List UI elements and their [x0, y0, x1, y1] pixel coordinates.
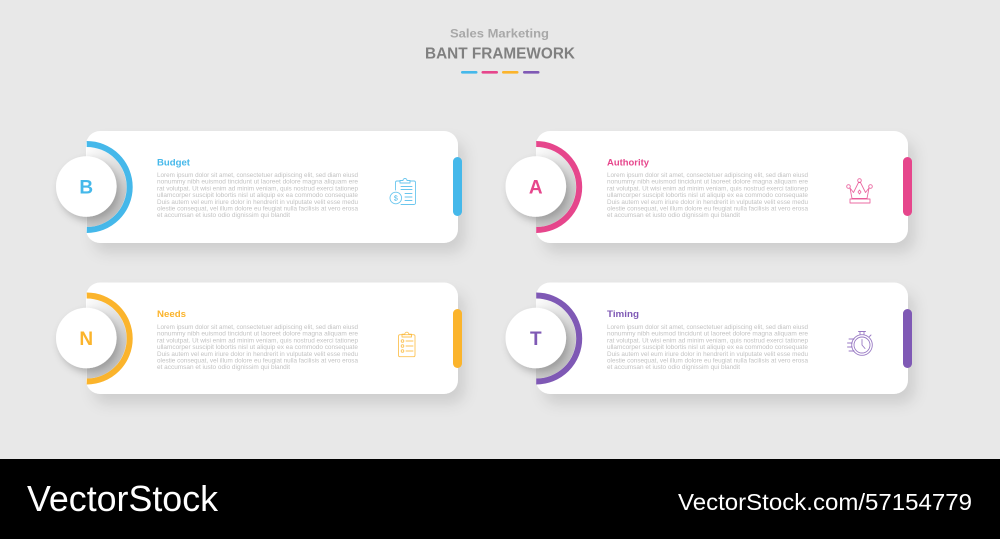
body text: olestie consequat, vel illum dolore eu feugiat nulla facilisis at vero erosa — [607, 358, 809, 364]
body text: Lorem ipsum dolor sit amet, consectetuer adipiscing elit, sed diam eiusd — [607, 324, 809, 331]
body text: ullamcorper suscipit lobortis nisl ut aliquip ex ea commodo consequate — [607, 192, 809, 199]
heading: Budget — [157, 158, 191, 168]
body text: ullamcorper suscipit lobortis nisl ut aliquip ex ea commodo consequate — [157, 344, 359, 351]
side tab — [453, 309, 462, 368]
body text — [607, 172, 809, 219]
body text — [157, 172, 359, 219]
body text: et accumsan et iusto odio dignissim qui blandit — [157, 212, 290, 219]
side tab — [453, 157, 462, 216]
side tab — [903, 157, 912, 216]
title: Sales Marketing — [450, 26, 549, 40]
icon: checklist clipboard — [398, 332, 415, 357]
body text: rat volutpat. Ut wisi enim ad minim veniam, quis nostrud exerci tationep — [157, 185, 359, 192]
body text: olestie consequat, vel illum dolore eu feugiat nulla facilisis at vero erosa — [607, 206, 809, 212]
icon: clipboard with dollar: $ — [394, 196, 398, 202]
heading: Authority — [607, 158, 650, 168]
body text: rat volutpat. Ut wisi enim ad minim veniam, quis nostrud exerci tationep — [607, 337, 809, 344]
body text: ullamcorper suscipit lobortis nisl ut aliquip ex ea commodo consequate — [607, 344, 809, 351]
shaded crescent — [536, 298, 576, 378]
panel: authority — [506, 131, 912, 243]
letter badge: T — [530, 329, 542, 350]
body text: nonummy nibh euismod tincidunt ut laoreet dolore magna aliquam ere — [607, 179, 809, 186]
footer url: VectorStock.com/57154779 — [678, 489, 972, 515]
body text: olestie consequat, vel illum dolore eu feugiat nulla facilisis at vero erosa — [157, 206, 359, 212]
arc — [87, 296, 130, 382]
letter badge: A — [529, 178, 543, 198]
letter badge: B — [79, 178, 93, 198]
icon: clipboard with dollar — [390, 178, 416, 204]
shaded crescent — [86, 147, 127, 227]
body text — [607, 324, 809, 371]
body text: ullamcorper suscipit lobortis nisl ut aliquip ex ea commodo consequate — [157, 192, 359, 199]
shaded crescent — [536, 147, 576, 227]
body text: Duis autem vel eum iriure dolor in hendrerit in vulputate velit esse medu — [607, 199, 809, 206]
footer bar — [0, 459, 1000, 539]
arc — [87, 144, 130, 230]
letter badge — [506, 156, 566, 217]
body text: rat volutpat. Ut wisi enim ad minim veniam, quis nostrud exerci tationep — [157, 337, 359, 344]
body text: Duis autem vel eum iriure dolor in hendrerit in vulputate velit esse medu — [157, 351, 359, 358]
arc — [536, 296, 579, 382]
body text — [157, 324, 359, 371]
heading: Timing — [607, 309, 639, 320]
icon: crown — [847, 179, 872, 203]
body text: et accumsan et iusto odio dignissim qui blandit — [607, 364, 740, 371]
body text: Lorem ipsum dolor sit amet, consectetuer adipiscing elit, sed diam eiusd — [607, 172, 809, 179]
letter badge — [56, 308, 117, 368]
arc — [536, 144, 579, 230]
side tab — [903, 309, 912, 368]
heading: Needs — [157, 309, 186, 320]
body text: et accumsan et iusto odio dignissim qui blandit — [607, 212, 740, 219]
title dashes — [461, 71, 540, 74]
shaded crescent — [86, 298, 127, 378]
footer logo: VectorStock — [27, 478, 219, 519]
title — [425, 26, 576, 62]
body text: Lorem ipsum dolor sit amet, consectetuer adipiscing elit, sed diam eiusd — [157, 172, 359, 179]
body text: Duis autem vel eum iriure dolor in hendrerit in vulputate velit esse medu — [607, 351, 809, 358]
body text: olestie consequat, vel illum dolore eu feugiat nulla facilisis at vero erosa — [157, 358, 359, 364]
body text: Lorem ipsum dolor sit amet, consectetuer adipiscing elit, sed diam eiusd — [157, 324, 359, 331]
panel: needs — [56, 282, 462, 394]
title: BANT FRAMEWORK — [425, 46, 576, 62]
letter badge — [506, 308, 566, 368]
body text: nonummy nibh euismod tincidunt ut laoreet dolore magna aliquam ere — [157, 331, 359, 338]
letter badge — [56, 156, 117, 217]
icon: stopwatch — [848, 332, 872, 355]
letter badge: N — [79, 329, 93, 350]
panel: timing — [506, 282, 912, 394]
body text: rat volutpat. Ut wisi enim ad minim veniam, quis nostrud exerci tationep — [607, 185, 809, 192]
body text: nonummy nibh euismod tincidunt ut laoreet dolore magna aliquam ere — [157, 179, 359, 186]
body text: Duis autem vel eum iriure dolor in hendrerit in vulputate velit esse medu — [157, 199, 359, 206]
body text: nonummy nibh euismod tincidunt ut laoreet dolore magna aliquam ere — [607, 331, 809, 338]
panel: budget — [56, 131, 462, 243]
body text: et accumsan et iusto odio dignissim qui blandit — [157, 364, 290, 371]
